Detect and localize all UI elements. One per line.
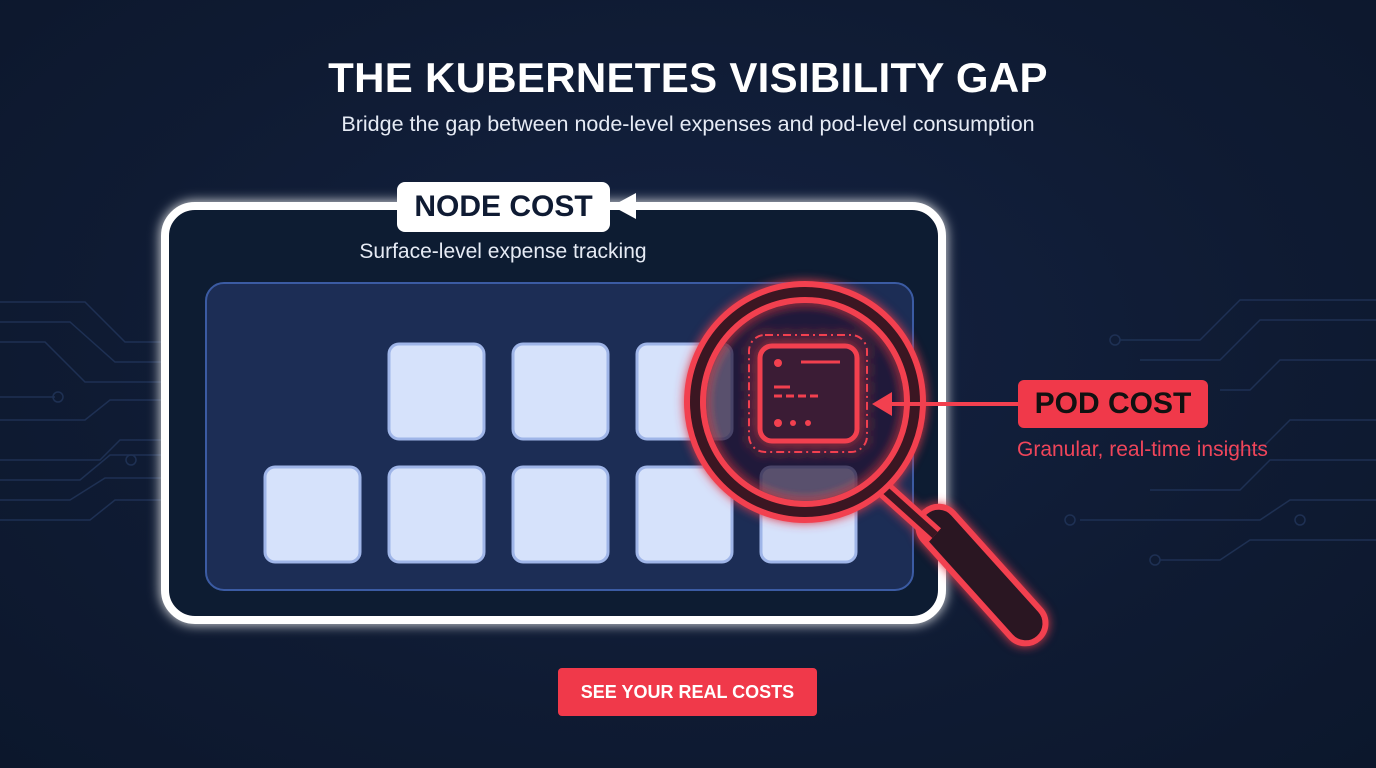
pod description: Granular, real-time insights xyxy=(1017,438,1268,461)
node cost label: NODE COST xyxy=(414,190,593,223)
button: SEE YOUR REAL COSTS xyxy=(581,682,794,702)
pod cost label xyxy=(1018,380,1208,428)
title: THE KUBERNETES VISIBILITY GAP xyxy=(328,54,1048,101)
pod cost label: POD COST xyxy=(1035,387,1191,420)
button xyxy=(558,668,817,716)
node cost label xyxy=(397,182,610,232)
node description: Surface-level expense tracking xyxy=(359,240,647,263)
arrow xyxy=(872,392,1020,416)
subtitle: Bridge the gap between node-level expenses and pod-level consumption xyxy=(341,112,1035,136)
